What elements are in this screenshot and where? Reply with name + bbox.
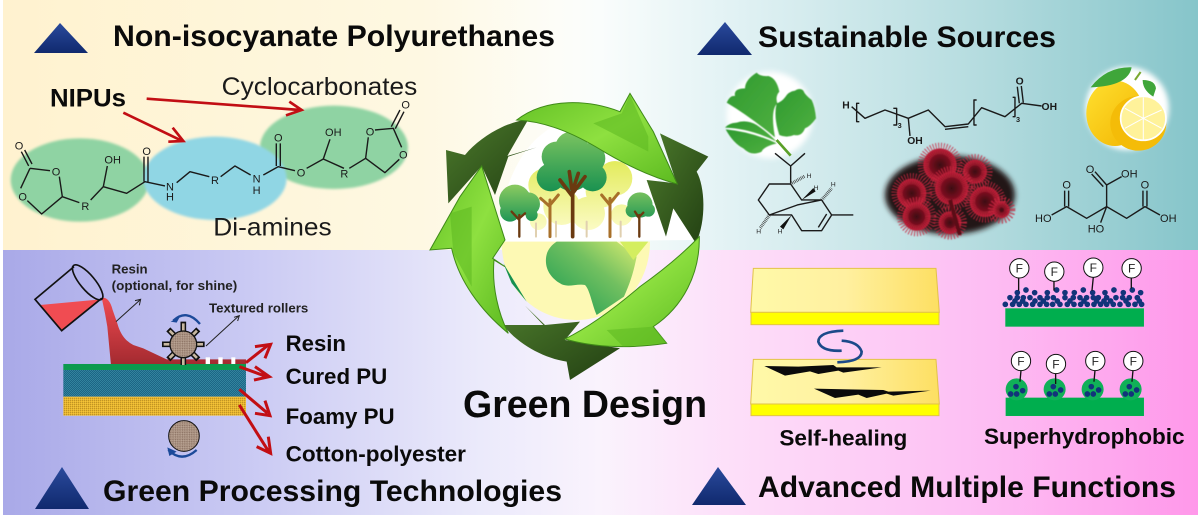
white interior: [498, 123, 698, 242]
molecule: ricinoleic acid: 3: [898, 121, 902, 130]
atom labels: O: [297, 168, 306, 180]
highlight: left cyclocarbonate: [11, 138, 149, 222]
textured roller: [162, 322, 205, 365]
label: NIPUs: NIPUs: [50, 85, 126, 113]
molecule: citric acid: O: [1062, 179, 1071, 191]
trees: [499, 132, 655, 237]
label: resin optional: Resin: [112, 263, 148, 277]
panel: non-isocyanate polyurethanes background: [3, 0, 600, 250]
molecule: terpene: H: [831, 182, 836, 189]
label: di-amines: Di-amines: [213, 214, 332, 242]
molecule: citric acid: [1035, 164, 1177, 236]
diagram: coating process: [35, 261, 466, 467]
molecule: terpene: H: [756, 228, 761, 235]
panel: sustainable sources background: [600, 0, 1198, 250]
heading: non-isocyanate polyurethanes: Non-isocyanate Polyurethanes: [113, 20, 555, 53]
F labels top: F: [1128, 262, 1135, 276]
arrow: to di-amines: [123, 113, 183, 142]
superhydrophobic F groups bottom: [1011, 351, 1143, 384]
icon: triangle bottom right: [692, 467, 746, 505]
pointer lines: [116, 299, 239, 346]
F labels top: F: [1090, 261, 1097, 275]
atom labels: H: [253, 185, 261, 197]
dark arrows: [446, 119, 708, 380]
molecule: ricinoleic acid: O: [1016, 77, 1024, 88]
F labels bottom: F: [1017, 354, 1025, 368]
icon: triangle bottom left: [35, 467, 89, 509]
F labels top: F: [1016, 262, 1023, 276]
molecule: citric acid: O: [1086, 164, 1095, 176]
molecule: ricinoleic acid: [842, 77, 1057, 147]
heading: sustainable sources: Sustainable Sources: [758, 21, 1056, 54]
molecule: ricinoleic acid: 3: [1016, 115, 1020, 124]
atom labels: [15, 100, 410, 213]
heading: green processing technologies: Green Processing Technologies: [103, 475, 562, 508]
label: self-healing: Self-healing: [779, 426, 907, 451]
label: textured rollers: Textured rollers: [209, 301, 308, 315]
label: superhydrophobic: Superhydrophobic: [984, 424, 1185, 449]
image: castor plant: [885, 148, 1015, 235]
sustainable sources images and molecules: [725, 67, 1177, 236]
chemical diagram: NIPU structure: [11, 73, 417, 242]
F labels bottom: F: [1092, 354, 1099, 368]
F labels bottom: F: [1130, 354, 1137, 368]
icon: recycling globe: [430, 93, 708, 380]
molecule bonds: [21, 110, 404, 214]
atom labels: O: [401, 100, 410, 112]
superhydrophobic bumps: [1006, 378, 1144, 416]
molecule: ricinoleic acid: H: [842, 100, 850, 111]
molecule: citric acid: O: [1141, 179, 1150, 191]
arrow: to cyclocarbonates: [147, 99, 302, 115]
molecule: terpene: [756, 153, 853, 235]
layer labels: [286, 331, 466, 467]
heading: advanced multiple functions: Advanced Multiple Functions: [758, 471, 1176, 504]
atom labels: O: [18, 191, 27, 203]
rotation arrowheads: [167, 317, 180, 456]
red arrows to layers: [239, 344, 271, 453]
healing arrows: [818, 331, 862, 362]
molecule: citric acid: HO: [1035, 213, 1052, 225]
atom labels: R: [81, 201, 89, 213]
atom labels: O: [15, 140, 24, 152]
layer labels: Foamy PU: [286, 404, 395, 429]
icon: triangle top left: [34, 23, 88, 53]
F labels top: F: [1051, 265, 1058, 279]
layer labels: Cured PU: [286, 364, 387, 389]
atom labels: N: [253, 174, 261, 186]
label: optional for shine: (optional, for shine): [112, 279, 237, 293]
heading: green design: Green Design: [463, 384, 707, 426]
atom labels: OH: [325, 127, 342, 139]
beaker: [35, 261, 107, 331]
F labels top: [1016, 261, 1135, 279]
atom labels: O: [52, 166, 61, 178]
molecule: ricinoleic acid: OH: [1042, 102, 1057, 113]
lower roller: [169, 421, 199, 451]
globe: [502, 242, 650, 320]
atom labels: H: [166, 192, 174, 204]
molecule: citric acid: OH: [1121, 168, 1138, 180]
arrow shading: [593, 95, 648, 152]
molecule: ricinoleic acid: OH: [907, 136, 923, 147]
rotation arrows: [168, 315, 200, 457]
cracks: [764, 365, 931, 398]
atom labels: O: [142, 146, 151, 158]
molecule: citric acid: HO: [1088, 224, 1105, 236]
F labels bottom: [1017, 354, 1137, 371]
atom labels: O: [399, 150, 408, 162]
molecule: terpene: H: [807, 173, 812, 180]
resin stream: [102, 298, 246, 365]
atom labels: OH: [104, 154, 121, 166]
highlight: di-amine: [143, 137, 287, 220]
slab: intact: [751, 268, 939, 325]
panel: advanced multiple functions background: [600, 250, 1198, 515]
atom labels: O: [366, 126, 375, 138]
slab: cracked: [751, 359, 939, 416]
molecule: terpene: H: [814, 185, 819, 192]
panel: green processing technologies background: [3, 250, 600, 515]
image: green leaf: [725, 72, 816, 158]
label: cyclocarbonates: Cyclocarbonates: [222, 73, 417, 101]
superhydrophobic rough surface: [1005, 290, 1144, 327]
image: lemon: [1086, 67, 1169, 151]
F labels bottom: F: [1052, 357, 1060, 371]
molecule: citric acid: OH: [1160, 213, 1177, 225]
highlight: right cyclocarbonate: [260, 106, 408, 189]
atom labels: O: [274, 133, 283, 145]
coating layers: [63, 357, 246, 416]
diagram: multiple functions: [751, 258, 1185, 451]
atom labels: R: [211, 175, 219, 187]
atom labels: N: [166, 182, 174, 194]
molecule: terpene: H: [778, 228, 783, 235]
layer labels: Cotton-polyester: [286, 442, 466, 467]
light arrows: [430, 93, 699, 347]
superhydrophobic F groups top: [1010, 258, 1141, 291]
icon: triangle top right: [697, 22, 752, 55]
layer labels: Resin: [286, 331, 346, 356]
atom labels: R: [340, 168, 348, 180]
